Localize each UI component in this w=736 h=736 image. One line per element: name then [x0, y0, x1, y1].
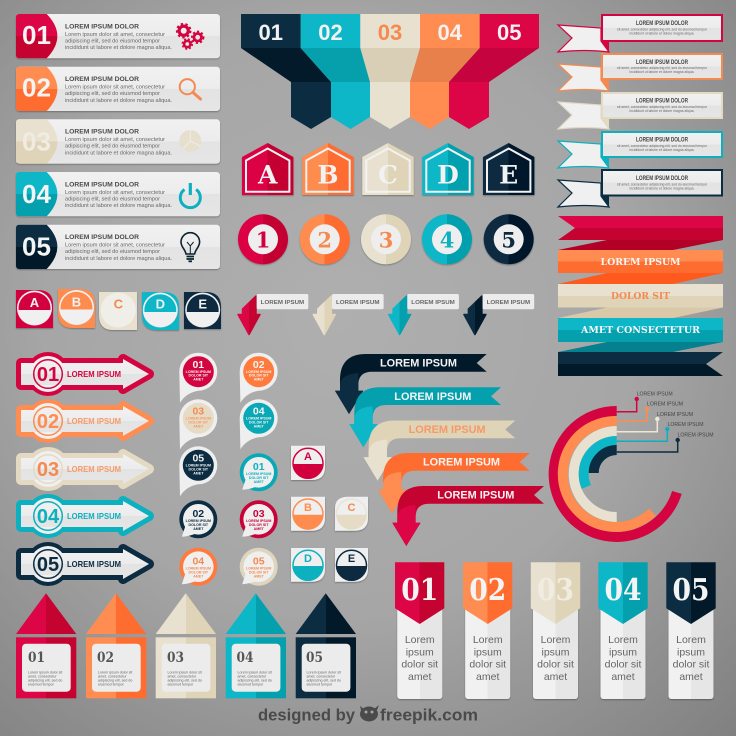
funnel segment 02: 02	[318, 20, 343, 45]
house card 05: eiusmod tempor	[306, 683, 333, 687]
card 03: 03	[22, 126, 51, 156]
round bubble red 03	[240, 500, 278, 538]
tile D	[142, 292, 179, 330]
house card 02: Lorem ipsum dolor sit	[98, 670, 132, 674]
round bubble cream 05: DOLOR SIT	[249, 570, 269, 574]
house card 03: amet, consectetur	[168, 674, 197, 678]
bubble orange 02: AMET	[254, 378, 265, 382]
card 03	[16, 119, 220, 164]
panel: numbered info cards	[16, 14, 220, 269]
round bubble navy 02: 02	[192, 508, 204, 520]
tile D: D	[156, 296, 165, 312]
tag 01: ipsum	[406, 646, 434, 658]
house card 04: eiusmod tempor	[238, 683, 264, 687]
ribbon box 4: sit amet, consectetur adipiscing elit, sed do eiusmod tempor	[617, 144, 708, 148]
house card 01: adipiscing elit, sed do	[28, 678, 62, 682]
tile B	[58, 289, 95, 328]
tag 02: 02	[469, 573, 506, 608]
tag 05	[666, 562, 716, 699]
tag 03: 03	[537, 573, 574, 608]
arrow 03: 03	[37, 459, 59, 481]
down arrow label red: LOREM IPSUM	[261, 300, 304, 306]
house card 05: Lorem ipsum dolor sit	[306, 670, 341, 674]
bubble orange 02	[240, 353, 278, 403]
card 04: Lorem ipsum dolor sit amet, consectetur	[65, 190, 165, 196]
ribbon box 2: incididunt ut labore et dolore magna aliqua.	[630, 70, 694, 74]
house card 05: amet, consectetur	[306, 674, 336, 678]
ribbon box 5	[558, 170, 722, 207]
footer credit	[258, 705, 478, 725]
bubble red 01	[179, 353, 217, 403]
tag 05: Lorem	[676, 634, 706, 646]
tag 01: Lorem	[405, 634, 435, 646]
curved arrow navy: LOREM IPSUM	[380, 358, 457, 370]
lower tile A: A	[304, 451, 312, 463]
round bubble red 03: DOLOR SIT	[249, 523, 269, 527]
tag 02: amet	[476, 671, 499, 683]
house card 02: eiusmod tempor	[98, 683, 125, 687]
house card 04	[226, 593, 286, 698]
tag 04: Lorem	[608, 634, 638, 646]
curved arrow orange	[378, 453, 530, 513]
panel: number circles	[238, 214, 534, 264]
round bubble navy 02: LOREM IPSUM	[186, 519, 211, 523]
house card 01: eiusmod tempor	[28, 683, 55, 687]
card 03: LOREM IPSUM DOLOR	[65, 129, 139, 136]
down arrow label red	[238, 294, 308, 334]
tag 01: dolor sit	[401, 658, 438, 670]
ribbon box 5: incididunt ut labore et dolore magna aliqua.	[630, 186, 694, 190]
card 01: LOREM IPSUM DOLOR	[65, 23, 139, 30]
bubble orange 02: DOLOR SIT	[249, 374, 269, 378]
round bubble orange 04: LOREM IPSUM	[186, 566, 211, 570]
house card 02: amet, consectetur	[98, 674, 127, 678]
circle 1: 1	[256, 228, 270, 252]
card 05: adipiscing elit, sed do eiusmod tempor	[65, 249, 160, 255]
bubble red 01: 01	[192, 359, 204, 371]
tag 03	[531, 562, 580, 699]
bubble teal 04: 04	[253, 406, 265, 418]
house card 01	[16, 593, 76, 698]
funnel segment 05	[449, 14, 539, 129]
bubble teal 04: AMET	[254, 424, 265, 428]
house card 04: amet, consectetur	[238, 674, 267, 678]
tag 03: amet	[544, 671, 567, 683]
ribbon box 3	[558, 93, 722, 129]
panel: letter tiles lower group	[291, 446, 368, 582]
arrow 02: 02	[37, 411, 59, 433]
arrow 01	[21, 352, 149, 396]
footer credit: designed by	[258, 706, 356, 725]
panel: folded ribbon	[558, 216, 723, 376]
round bubble orange 04: DOLOR SIT	[189, 570, 209, 574]
circle 4	[422, 214, 472, 264]
ribbon box 2: LOREM IPSUM DOLOR	[636, 60, 689, 66]
arrow 05: LOREM IPSUM	[67, 559, 121, 569]
house badge D	[422, 143, 474, 195]
round bubble orange 04	[179, 548, 217, 586]
round bubble navy 02: DOLOR SIT	[189, 523, 209, 527]
funnel segment 04: 04	[437, 20, 463, 45]
tag 03: Lorem	[541, 634, 571, 646]
card 01: Lorem ipsum dolor sit amet, consectetur	[65, 32, 165, 38]
card 03: incididunt ut labore et dolore magna aliqua.	[65, 150, 172, 156]
card 02: incididunt ut labore et dolore magna aliqua.	[65, 98, 172, 104]
bubble teal 04: DOLOR SIT	[249, 420, 269, 424]
arrow 03: LOREM IPSUM	[67, 464, 121, 474]
tag 04	[598, 562, 648, 699]
house card 01: Lorem ipsum dolor sit	[28, 670, 62, 674]
arrow 02	[21, 399, 149, 443]
down arrow label navy: LOREM IPSUM	[487, 300, 530, 306]
curved arrow red: LOREM IPSUM	[437, 490, 514, 502]
leader lines and labels: LOREM IPSUM	[637, 392, 673, 398]
tag 02: Lorem	[473, 634, 503, 646]
card 01: 01	[22, 20, 51, 50]
curved arrow teal: LOREM IPSUM	[394, 391, 471, 403]
down arrow label navy	[464, 294, 534, 334]
panel: ribbon tail text boxes	[558, 15, 722, 207]
ribbon box 1: sit amet, consectetur adipiscing elit, sed do eiusmod tempor	[617, 28, 708, 32]
bubble teal 04	[240, 399, 278, 449]
card 05: 05	[22, 232, 51, 262]
ribbon box 3: LOREM IPSUM DOLOR	[636, 98, 689, 104]
round bubble cream 05: LOREM IPSUM	[246, 566, 271, 570]
arrow 04: 04	[37, 506, 60, 528]
round bubble teal 01: 01	[253, 461, 265, 473]
house card 05: 05	[306, 650, 323, 666]
round bubble cream 05: 05	[253, 555, 265, 567]
funnel segment 05: 05	[497, 20, 522, 45]
bubble navy 05	[179, 446, 217, 496]
round bubble red 03: LOREM IPSUM	[246, 519, 271, 523]
funnel segment 01	[241, 14, 331, 129]
icon: gears	[177, 24, 204, 49]
round bubble cream 05	[240, 548, 278, 586]
panel: down arrows with labels	[238, 294, 534, 334]
circle 3	[361, 214, 411, 264]
house card 01: amet, consectetur	[28, 674, 57, 678]
house card 03: 03	[167, 650, 184, 666]
card 02: 02	[22, 73, 51, 103]
icon: magnifier	[180, 79, 200, 99]
tile A: A	[30, 295, 40, 310]
icon: pie chart	[179, 130, 201, 152]
bubble red 01: AMET	[193, 378, 204, 382]
round bubble teal 01: LOREM IPSUM	[246, 472, 271, 476]
ribbon box 1	[558, 15, 722, 52]
house badge B	[302, 143, 354, 195]
bubble orange 02: LOREM IPSUM	[246, 370, 271, 374]
card 05: incididunt ut labore et dolore magna aliqua.	[65, 256, 172, 262]
down arrow label cream: LOREM IPSUM	[336, 300, 380, 306]
footer credit: freepik.com	[380, 706, 478, 725]
arrow 01: 01	[37, 364, 59, 386]
card 02: LOREM IPSUM DOLOR	[65, 76, 139, 83]
arrow 03	[21, 447, 149, 491]
icon: freepik logo	[360, 705, 379, 722]
icon: light bulb	[181, 233, 200, 261]
bubble red 01: LOREM IPSUM	[186, 370, 211, 374]
circle 2: 2	[317, 228, 332, 252]
funnel segment 02	[301, 14, 370, 129]
tag 01	[395, 562, 444, 699]
house badge A: A	[257, 160, 278, 190]
funnel segment 03	[360, 14, 420, 129]
lower tile E: E	[348, 553, 355, 565]
bubble teal 04: LOREM IPSUM	[246, 417, 271, 421]
lower tile B: B	[304, 502, 312, 514]
bubble navy 05: DOLOR SIT	[189, 467, 209, 471]
arrow 05	[21, 542, 149, 586]
tag 02	[463, 562, 512, 699]
tile A	[16, 290, 53, 328]
round bubble teal 01: DOLOR SIT	[249, 476, 269, 480]
tag 05: 05	[672, 573, 710, 608]
card 03: Lorem ipsum dolor sit amet, consectetur	[65, 137, 165, 143]
circle 2	[300, 214, 350, 264]
ribbon box 3: incididunt ut labore et dolore magna aliqua.	[630, 109, 694, 113]
ribbon band orange: LOREM IPSUM	[600, 257, 681, 268]
card 01: incididunt ut labore et dolore magna aliqua.	[65, 45, 172, 51]
ribbon box 3: sit amet, consectetur adipiscing elit, sed do eiusmod tempor	[617, 105, 708, 109]
lower tile D: D	[304, 553, 312, 565]
curved arrow cream: LOREM IPSUM	[409, 424, 486, 436]
bubble red 01: DOLOR SIT	[189, 374, 209, 378]
card 02	[16, 67, 220, 111]
ribbon box 2	[558, 54, 722, 91]
curved arrow teal	[349, 387, 501, 447]
tag 02: dolor sit	[469, 658, 506, 670]
leader lines and labels: LOREM IPSUM	[678, 432, 714, 438]
ribbon box 4	[558, 132, 722, 168]
ribbon box 5: sit amet, consectetur adipiscing elit, sed do eiusmod tempor	[617, 182, 708, 186]
ribbon box 5: LOREM IPSUM DOLOR	[636, 176, 689, 182]
house card 05	[296, 593, 356, 698]
bubble navy 05: AMET	[193, 471, 204, 475]
card 04	[16, 172, 220, 216]
circle 4: 4	[440, 228, 454, 252]
tag 03: ipsum	[541, 646, 570, 658]
panel: house cards	[16, 593, 356, 698]
bubble cream 03: AMET	[193, 424, 204, 428]
ribbon band navy	[558, 352, 723, 376]
card 04: LOREM IPSUM DOLOR	[65, 181, 139, 188]
funnel segment 01: 01	[258, 20, 283, 45]
curved arrow orange: LOREM IPSUM	[423, 457, 500, 469]
ribbon box 4: incididunt ut labore et dolore magna aliqua.	[630, 148, 694, 152]
round bubble navy 02	[179, 500, 217, 538]
house badge B: B	[317, 160, 339, 190]
tile C: C	[114, 296, 124, 312]
round bubble cream 05: AMET	[254, 574, 265, 578]
bubble navy 05: 05	[192, 453, 204, 465]
funnel segment 04	[410, 14, 480, 129]
panel: funnel banner	[241, 14, 539, 129]
circle 5: 5	[501, 228, 516, 252]
arrow 04	[21, 494, 149, 538]
panel: numbered tags	[395, 562, 716, 699]
tag 04: dolor sit	[605, 658, 641, 670]
house card 02	[86, 593, 146, 698]
tile E	[184, 292, 221, 329]
house card 04: Lorem ipsum dolor sit	[238, 670, 272, 674]
tile B: B	[72, 294, 81, 310]
ribbon box 1: incididunt ut labore et dolore magna aliqua.	[630, 32, 694, 36]
bubble orange 02: 02	[253, 359, 265, 371]
ribbon box 4: LOREM IPSUM DOLOR	[636, 137, 689, 143]
panel: block arrows	[21, 352, 149, 586]
card 03: adipiscing elit, sed do eiusmod tempor	[65, 144, 160, 150]
leader lines and labels: LOREM IPSUM	[647, 402, 683, 408]
card 04: adipiscing elit, sed do eiusmod tempor	[65, 196, 160, 202]
tile E: E	[198, 296, 207, 312]
round bubble orange 04: 04	[192, 555, 204, 567]
circle 5	[484, 214, 534, 264]
tag 05: dolor sit	[673, 658, 709, 670]
house badge A	[242, 143, 293, 195]
house badge E	[483, 143, 534, 195]
arrow 04: LOREM IPSUM	[67, 511, 121, 521]
house card 03: adipiscing elit, sed do	[168, 678, 202, 682]
tag 05: amet	[679, 671, 703, 683]
ribbon box 2: sit amet, consectetur adipiscing elit, sed do eiusmod tempor	[617, 66, 708, 70]
down arrow label teal: LOREM IPSUM	[411, 300, 455, 306]
round bubble red 03: 03	[253, 508, 265, 520]
funnel segment 03: 03	[378, 20, 402, 45]
card 02: Lorem ipsum dolor sit amet, consectetur	[65, 84, 165, 90]
curved arrow cream	[364, 420, 515, 480]
house card 03: Lorem ipsum dolor sit	[168, 670, 202, 674]
chart: concentric arc chart	[554, 392, 714, 537]
down arrow label teal	[389, 294, 459, 334]
house card 04: adipiscing elit, sed do	[238, 678, 272, 682]
house badge C	[362, 143, 414, 195]
ribbon band orange	[558, 250, 723, 284]
leader lines and labels: LOREM IPSUM	[657, 412, 693, 418]
icon: power button	[180, 183, 200, 208]
house card 04: 04	[236, 650, 254, 666]
curved arrow red	[392, 486, 544, 546]
round bubble navy 02: AMET	[193, 527, 204, 531]
house card 03: eiusmod tempor	[168, 683, 194, 687]
round bubble red 03: AMET	[254, 527, 265, 531]
tag 04: 04	[604, 573, 642, 608]
arrow 01: LOREM IPSUM	[67, 369, 121, 379]
bubble navy 05: LOREM IPSUM	[186, 464, 211, 468]
leader lines and labels: LOREM IPSUM	[668, 422, 704, 428]
card 05	[16, 225, 220, 269]
arc rings	[554, 411, 677, 537]
bubble cream 03: 03	[192, 406, 204, 418]
tile C	[99, 292, 137, 330]
tag 01: amet	[408, 671, 431, 683]
lower tile C: C	[348, 502, 356, 514]
panel: letter house badges	[242, 143, 534, 195]
ribbon band teal: AMET CONSECTETUR	[580, 325, 700, 336]
card 05: LOREM IPSUM DOLOR	[65, 234, 139, 241]
circle 3: 3	[379, 228, 393, 252]
house badge C: C	[378, 160, 398, 190]
card 04: 04	[22, 179, 51, 209]
tag 05: ipsum	[677, 646, 705, 658]
bubble cream 03: DOLOR SIT	[189, 420, 209, 424]
house card 03	[156, 593, 216, 698]
round bubble teal 01: AMET	[254, 480, 265, 484]
bubble cream 03	[179, 399, 217, 449]
round bubble orange 04: AMET	[193, 574, 204, 578]
house badge E: E	[499, 160, 518, 190]
tag 04: amet	[611, 671, 635, 683]
leader lines and labels	[617, 392, 714, 452]
house card 02: 02	[97, 650, 114, 666]
house card 01: 01	[28, 650, 45, 666]
ribbon box 1: LOREM IPSUM DOLOR	[636, 21, 689, 27]
panel: speech bubbles	[179, 353, 278, 586]
tag 02: ipsum	[474, 646, 502, 658]
card 01: adipiscing elit, sed do eiusmod tempor	[65, 38, 160, 44]
circle 1	[238, 214, 288, 264]
ribbon band cream	[558, 284, 723, 318]
card 04: incididunt ut labore et dolore magna aliqua.	[65, 203, 172, 209]
round bubble teal 01	[240, 453, 278, 491]
card 05: Lorem ipsum dolor sit amet, consectetur	[65, 242, 165, 248]
arrow 05: 05	[37, 554, 59, 576]
card 01	[16, 14, 220, 58]
arrow 02: LOREM IPSUM	[67, 416, 121, 426]
card 02: adipiscing elit, sed do eiusmod tempor	[65, 91, 160, 97]
tag 01: 01	[401, 573, 438, 608]
house card 05: adipiscing elit, sed do	[306, 678, 341, 682]
curved arrow navy	[335, 354, 487, 414]
house card 02: adipiscing elit, sed do	[98, 678, 132, 682]
panel: curved ribbon arrows	[335, 354, 544, 546]
panel: letter tiles top row	[16, 289, 221, 330]
ribbon band cream: DOLOR SIT	[611, 291, 670, 302]
ribbon band red	[558, 216, 723, 250]
ribbon band teal	[558, 318, 723, 352]
tag 04: ipsum	[609, 646, 637, 658]
bubble cream 03: LOREM IPSUM	[186, 417, 211, 421]
tag 03: dolor sit	[537, 658, 574, 670]
down arrow label cream	[313, 294, 384, 334]
house badge D: D	[437, 160, 459, 190]
